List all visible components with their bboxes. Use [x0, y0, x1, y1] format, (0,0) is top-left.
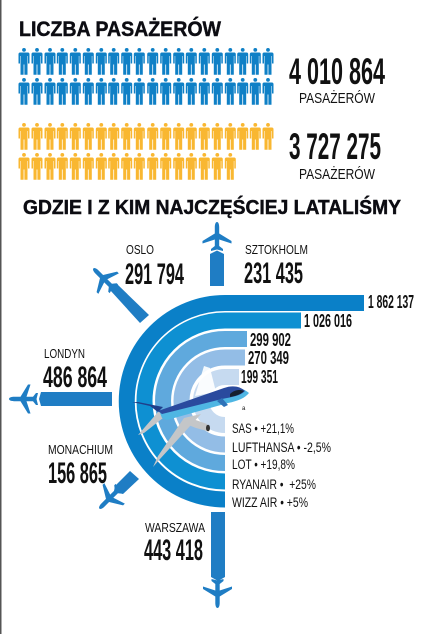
- airline list: WIZZ AIR • +5%: [232, 495, 308, 510]
- pictogram: blue passengers: [18, 48, 274, 105]
- number: 4 010 864 passengers: [289, 51, 385, 107]
- central airplane: [132, 386, 249, 467]
- label: Monachium: 156 865: [48, 457, 107, 490]
- label: Oslo: OSLO: [126, 243, 154, 257]
- airline list: LOT • +19,8%: [232, 457, 295, 472]
- label: Sztokholm: SZTOKHOLM: [245, 243, 308, 257]
- route arrow: Oslo: [83, 258, 149, 323]
- bar values: [241, 292, 414, 387]
- route arrow: Warszawa: [203, 512, 232, 608]
- airline list: SAS • +21,1%: [232, 421, 294, 436]
- bar values: 1 026 016: [304, 311, 352, 331]
- label: Oslo: 291 794: [125, 258, 184, 291]
- label: Monachium: [48, 443, 113, 490]
- title: liczba pasażerów: LICZBA PASAŻERÓW: [19, 17, 221, 41]
- pictogram: yellow passengers: [18, 123, 274, 180]
- bar values: 299 902: [250, 330, 291, 350]
- airline list: RYANAIR • +25%: [232, 477, 316, 492]
- heading: gdzie i z kim: GDZIE I Z KIM NAJCZĘŚCIEJ LATALIŚMY: [23, 195, 402, 219]
- label: Londyn: LONDYN: [44, 347, 85, 361]
- airline list: LUFTHANSA • -2,5%: [232, 440, 331, 455]
- route arrow: Monachium: [89, 471, 139, 519]
- label: Warszawa: WARSZAWA: [145, 521, 206, 535]
- label: Londyn: 486 864: [43, 361, 107, 394]
- label: Sztokholm: 231 435: [244, 257, 303, 290]
- label: Monachium: MONACHIUM: [48, 443, 113, 457]
- airline list: [232, 421, 331, 510]
- bar values: 199 351: [241, 367, 278, 387]
- small mark: a: [242, 406, 246, 412]
- route arrow: Londyn: [9, 384, 112, 414]
- label: Londyn: [43, 347, 107, 394]
- route arrow: Sztokholm: [202, 222, 232, 286]
- label: Oslo: [125, 243, 184, 291]
- label: Sztokholm: [244, 243, 308, 290]
- label: Warszawa: [144, 521, 206, 567]
- number: 3 727 275 passengers: PASAŻERÓW: [299, 165, 376, 183]
- label: Warszawa: 443 418: [144, 534, 203, 567]
- arc chart: airlines: [127, 303, 364, 500]
- bar values: 270 349: [248, 348, 289, 368]
- number: 3 727 275 passengers: [289, 126, 381, 183]
- number: 4 010 864 passengers: PASAŻERÓW: [299, 89, 376, 107]
- ghost plane wing: [195, 366, 216, 396]
